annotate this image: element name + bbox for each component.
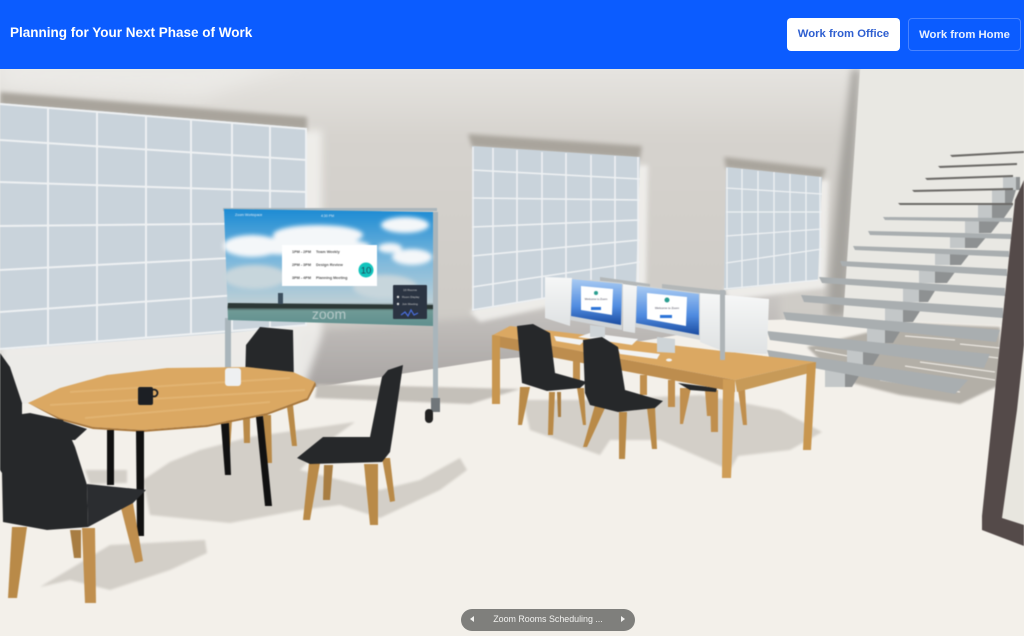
centre window (468, 134, 642, 311)
side status panel: 10 Rooms (403, 288, 417, 292)
front left chair (0, 413, 146, 603)
desk chair right (583, 337, 663, 459)
header bar (0, 0, 1024, 69)
long desk (492, 326, 816, 478)
privacy partition panels (545, 277, 769, 360)
desk chair left (517, 324, 587, 435)
icon: right arrow (621, 616, 625, 622)
icon: caster wheel (425, 398, 440, 423)
keyboards (554, 333, 660, 359)
right wall (843, 69, 1024, 330)
monitor right: Welcome to Zoom (655, 306, 680, 310)
icon: coffee mug (138, 387, 158, 405)
back desk legs and third chair (573, 355, 747, 432)
wall glow top (0, 60, 300, 100)
wall glow right window (724, 180, 829, 300)
side status panel: Join Meeting (402, 302, 418, 306)
stair treads (898, 151, 1024, 205)
back chair behind round table (226, 327, 297, 463)
meeting schedule card: Team Weekly (316, 250, 341, 254)
button: Work from Office: Work from Office (798, 28, 889, 40)
pillar shadow (826, 69, 860, 317)
meeting schedule card (282, 245, 377, 286)
right window (724, 157, 826, 290)
meeting schedule card: Planning Meeting (316, 276, 348, 280)
meeting schedule card: 10 (361, 266, 371, 276)
side status panel (393, 285, 427, 319)
meeting schedule card: 2PM - 3PM (292, 263, 311, 267)
desk mouse (666, 358, 672, 362)
carousel pill (461, 609, 635, 631)
back wall (0, 69, 860, 409)
button: Work from Home: Work from Home (919, 29, 1010, 41)
button: Work from Office (787, 18, 900, 51)
button: Work from Home (908, 18, 1021, 51)
whiteboard screen: 4:30 PM (321, 214, 334, 218)
monitor left: Welcome to Zoom (585, 297, 608, 301)
front right chair (297, 365, 403, 525)
floor shadows (40, 384, 822, 590)
round table (28, 367, 316, 536)
monitor left (570, 278, 623, 337)
whiteboard base holder (225, 368, 241, 386)
stair floor shadow (807, 323, 1000, 404)
carousel label: Zoom Rooms Scheduling ... (493, 614, 603, 624)
zoom logo: zoom (312, 306, 346, 322)
meeting schedule card: 1PM - 2PM (292, 250, 311, 254)
whiteboard stand (223, 208, 438, 402)
stair stringers (845, 177, 1020, 387)
wall base shadow (300, 290, 780, 400)
left window (0, 92, 307, 350)
whiteboard screen: Zoom Workspace (235, 213, 262, 217)
table legs (107, 430, 114, 485)
wall glow centre window (470, 165, 648, 322)
floor (0, 318, 1024, 636)
icon: left arrow (470, 616, 474, 622)
meeting schedule card: 3PM - 4PM (292, 276, 311, 280)
mirror frame right (982, 180, 1024, 546)
side status panel: Room Display (402, 295, 420, 299)
title: Planning for Your Next Phase of Work (10, 25, 252, 40)
monitor right (635, 285, 700, 353)
staircase (767, 151, 1024, 404)
left partial chair (0, 353, 87, 440)
whiteboard screen (223, 209, 433, 326)
wall glow left (0, 130, 322, 410)
meeting schedule card: Design Review (316, 263, 343, 267)
